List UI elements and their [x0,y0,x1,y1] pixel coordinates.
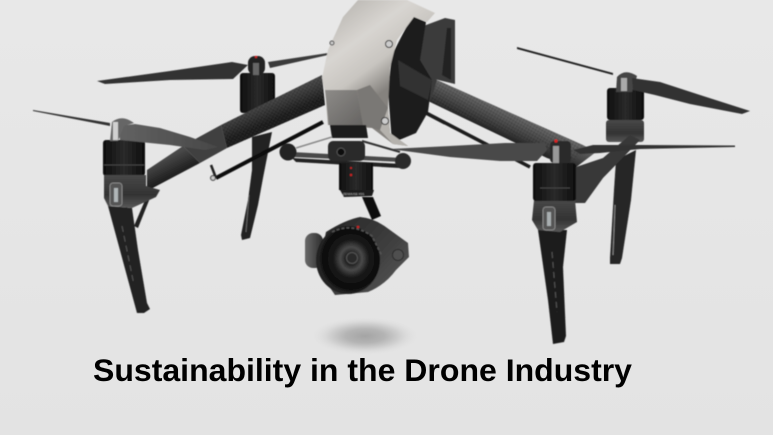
front right rotor [390,139,735,344]
camera side grip [305,233,323,268]
rear right motor [607,88,644,120]
gimbal mount [280,125,411,169]
front left rotor [33,110,218,313]
rear right leg [610,150,636,264]
right strut [407,103,530,167]
front left motor [103,140,145,176]
front left collar [104,175,160,208]
fuselage interior [388,16,432,143]
camera [305,217,409,295]
front right hub [550,141,571,163]
right arm [400,60,596,168]
rear right rotor [517,47,750,264]
front left leg brace [134,198,150,228]
camera neck [362,197,381,220]
ground shadow [309,316,421,356]
rear right propeller [517,47,613,75]
gimbal motor: ZENMUSE X5S [343,192,364,196]
rear left rotor [97,53,328,240]
gimbal motor [339,163,374,197]
camera body [318,217,409,295]
front right collar [532,200,577,232]
rear left propeller [97,62,248,84]
right arm link to rear motor [573,135,640,203]
rear left leg [241,132,272,240]
front left light [110,183,122,206]
front right motor [533,163,576,201]
left strut [211,122,323,180]
camera lens [316,226,380,294]
drone [33,0,750,344]
front right propeller [390,143,547,161]
battery box [418,18,455,84]
rear right hub [616,72,637,92]
front left propeller [33,110,110,126]
front left hub [110,118,134,141]
front left leg [108,206,150,313]
front right light [543,207,555,230]
fuselage shell [322,0,435,146]
left arm [147,75,325,191]
body screws [386,40,392,48]
title: Sustainability in the Drone Industry [93,352,632,388]
rear left motor [240,73,275,113]
front right leg [538,230,567,344]
